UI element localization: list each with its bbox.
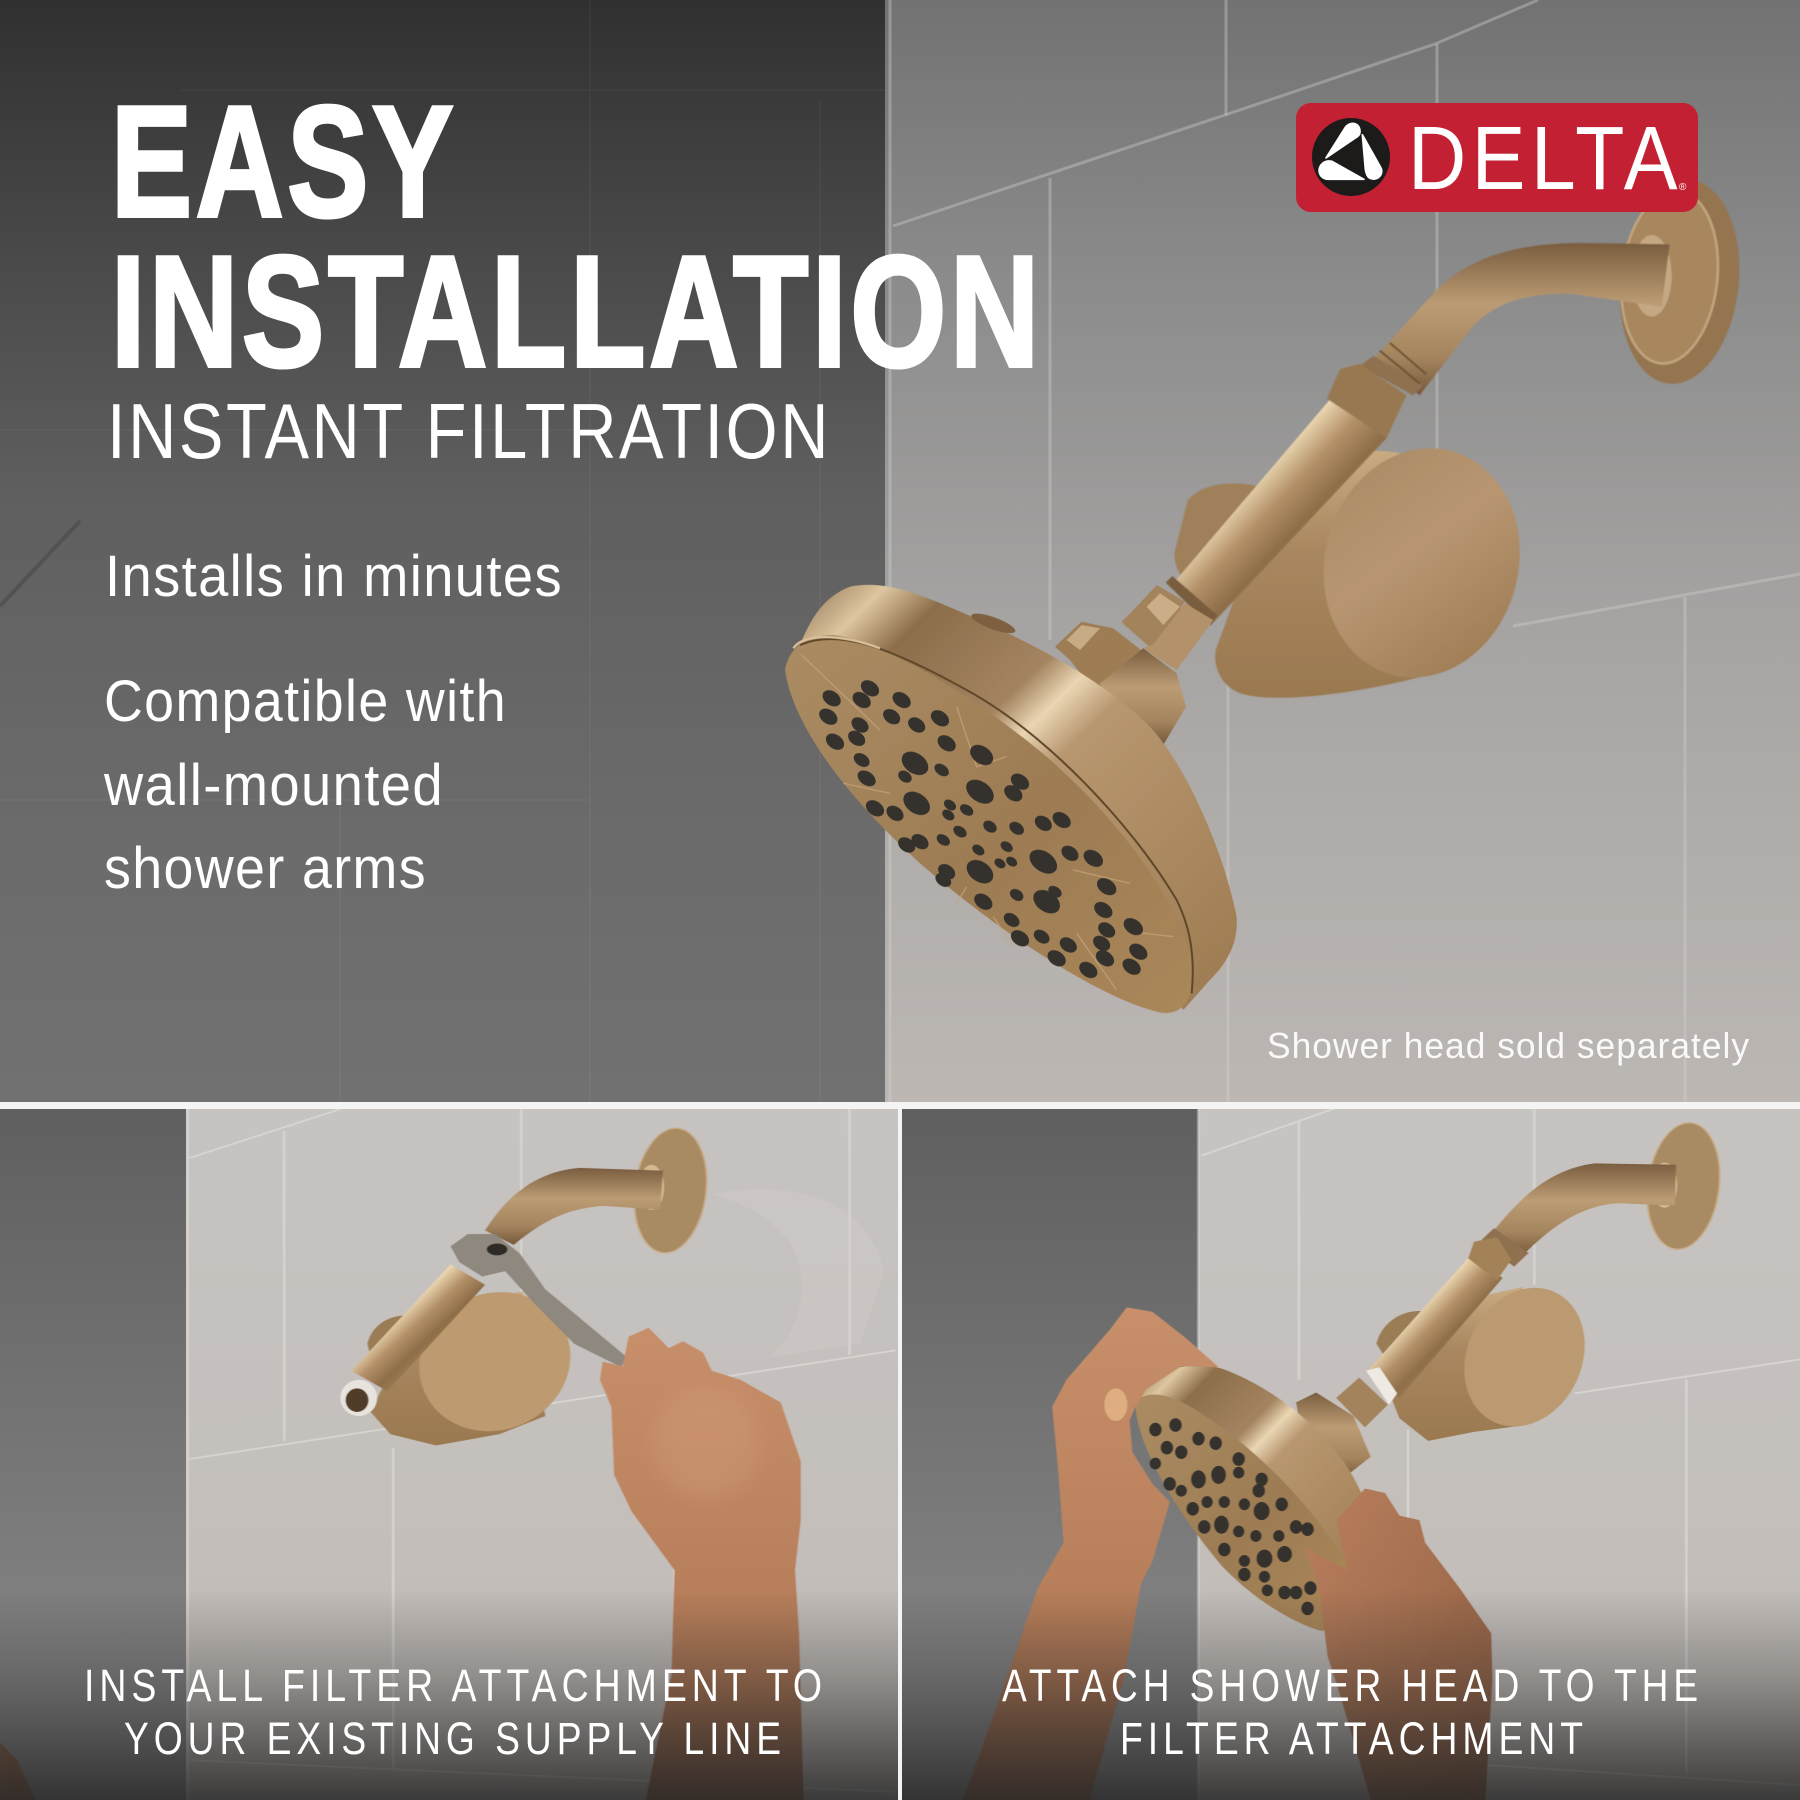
wrench hole: [487, 1243, 507, 1255]
step 2 filter body: [1388, 1287, 1526, 1441]
filter collar: [1166, 576, 1217, 625]
step 2 nozzles: [1149, 1418, 1317, 1615]
subtitle: INSTANT FILTRATION: [107, 387, 831, 475]
step 2 pipe: [1368, 1257, 1503, 1398]
caption: step 1: INSTALL FILTER ATTACHMENT TO: [84, 1660, 827, 1711]
head stub: [1055, 622, 1141, 686]
step 2 lower nut: [1336, 1378, 1388, 1427]
step 2 head face: [1135, 1395, 1350, 1631]
caption: step 2: [1002, 1660, 1703, 1764]
step 2 bottom shade: [902, 1590, 1800, 1800]
shower assembly: [1121, 174, 1749, 698]
hero dark side wall: [0, 0, 885, 1102]
step 2 nut: [1468, 1237, 1511, 1280]
filter face disc: [1324, 448, 1520, 678]
nozzles: [816, 677, 1151, 981]
step 2 shower arm: [1494, 1163, 1676, 1255]
step 1 flange inner: [643, 1164, 664, 1210]
caption: step 2: FILTER ATTACHMENT: [1120, 1713, 1588, 1764]
head connector nut: [1132, 585, 1185, 612]
edge of other arm: [0, 1742, 36, 1800]
panel: step 2 attach head: [902, 1090, 1800, 1800]
step 2 side wall: [902, 1109, 1199, 1800]
logo triangle mark: [1319, 123, 1382, 179]
step 1 pipe: [351, 1264, 485, 1391]
step 1 filter body: [370, 1291, 545, 1445]
step 2 thread: [1480, 1228, 1529, 1267]
registered mark: ®: [1679, 182, 1687, 193]
shower arm: [1373, 243, 1670, 395]
divider band: [0, 1102, 1800, 1109]
connector pipe: [1143, 603, 1213, 670]
wall flange: [1620, 181, 1740, 384]
step 2 flange inner: [1652, 1162, 1677, 1208]
hand and arm: [600, 1328, 804, 1800]
title line 2: INSTALLATION: [111, 224, 1043, 400]
feature: compatibility: wall-mounted: [103, 753, 444, 818]
step 2 flange: [1641, 1120, 1726, 1252]
logo wordmark: DELTA: [1408, 109, 1683, 209]
upper nut: [1327, 364, 1406, 438]
lower nut: [1121, 600, 1181, 646]
left hand and arm: [963, 1307, 1219, 1800]
panel: hero: [0, 0, 1800, 1102]
fingernail: [1104, 1388, 1127, 1421]
feature: compatibility: Compatible with: [104, 669, 507, 734]
hero tiled wall: [885, 0, 1800, 1102]
caption: step 1: [84, 1660, 827, 1764]
right hand and arm: [1305, 1488, 1492, 1800]
head neck: [1100, 648, 1186, 745]
step 1 threaded end: [340, 1380, 377, 1416]
filter pipe: [1171, 395, 1387, 625]
logo black circle: [1312, 118, 1390, 196]
step 2 filter bump: [1376, 1311, 1428, 1362]
title line 1: EASY: [111, 74, 457, 250]
hand knuckle highlight: [654, 1389, 758, 1498]
step 1 shower arm: [485, 1168, 663, 1245]
shower head: [785, 585, 1237, 1013]
step 2 tiled wall: [1199, 1109, 1800, 1800]
head dome shadow: [971, 613, 1016, 634]
face rim line: [800, 639, 1193, 993]
feature: installs in minutes: Installs in minutes: [105, 544, 563, 609]
vertical divider: [898, 1102, 902, 1800]
panel: step 1 install filter: [0, 1090, 898, 1800]
footnote: Shower head sold separately: [1267, 1025, 1750, 1066]
step 1 flange: [633, 1127, 708, 1254]
feature list: [103, 544, 563, 901]
logo red plate: [1296, 103, 1698, 212]
step 1 side wall: [0, 1109, 186, 1800]
step 2 head rim: [1138, 1365, 1366, 1602]
logo: Delta: [1296, 103, 1698, 212]
feature: compatibility: shower arms: [104, 836, 427, 901]
caption: step 1: YOUR EXISTING SUPPLY LINE: [124, 1713, 786, 1764]
wrench: [451, 1234, 627, 1367]
step 1 bottom shade: [0, 1590, 898, 1800]
face creases: [802, 655, 1173, 990]
step 1 pipe hole: [346, 1388, 369, 1412]
step 2 filter disc: [1449, 1279, 1600, 1435]
step 1 filter bump: [366, 1315, 404, 1352]
arm thread: [1360, 356, 1423, 395]
wall reflection: [712, 1189, 884, 1357]
headline block: [107, 74, 1043, 475]
feature: compatibility: [103, 669, 507, 901]
head face: [785, 635, 1193, 1013]
step 2 white tape: [1366, 1367, 1397, 1405]
step 2 stub: [1296, 1392, 1371, 1479]
step 1 tiled wall: [186, 1109, 898, 1800]
step 1 filter disc: [419, 1292, 571, 1432]
filter body: [1174, 451, 1443, 698]
head rim: [800, 585, 1237, 1010]
